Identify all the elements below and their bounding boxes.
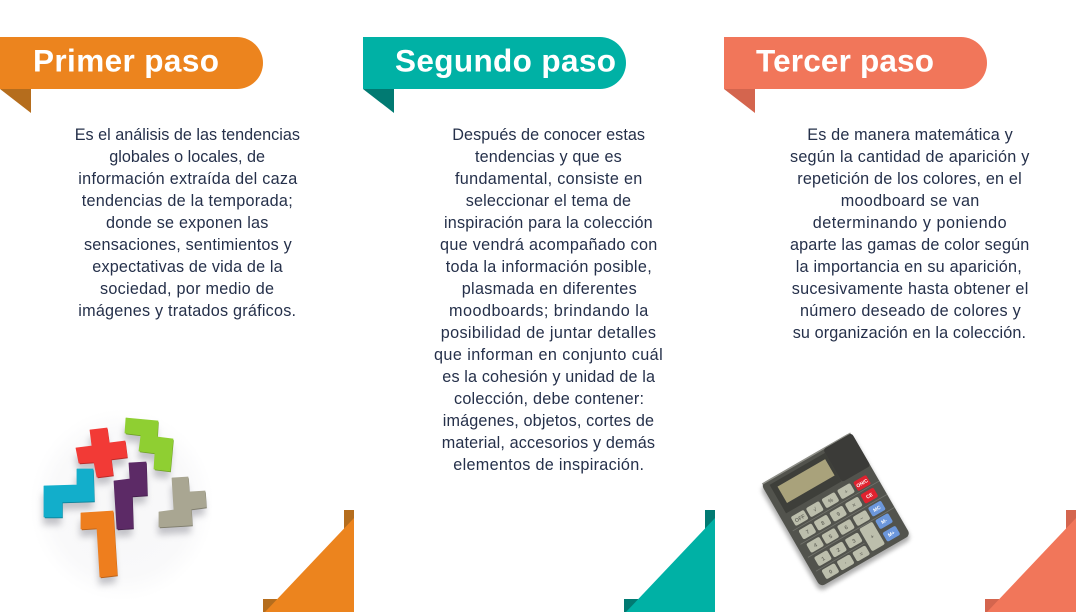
text block: primer paso: donde se exponen las: [106, 214, 268, 232]
text block: tercer paso: sucesivamente hasta obtener el: [792, 280, 1028, 298]
icon: calculator: 2: [836, 547, 842, 554]
text block: tercer paso: Es de manera matemática y: [807, 126, 1014, 144]
icon: calculator: ×: [851, 502, 857, 509]
text block: tercer paso: repetición de los colores, en el: [797, 170, 1022, 188]
text block: segundo paso: que informan en conjunto cuál: [434, 346, 663, 364]
text block: segundo paso: tendencias y que es: [475, 148, 622, 166]
text block: segundo paso: seleccionar el tema de: [466, 192, 631, 210]
text block: segundo paso: colección, debe contener:: [454, 390, 644, 408]
text block: segundo paso: posibilidad de juntar detalles: [441, 324, 656, 342]
icon: calculator: 3: [851, 538, 857, 545]
icon: calculator: OFF: [794, 513, 807, 524]
heading ribbon: Tercer paso: Tercer paso: [756, 42, 934, 78]
icon: calculator: −: [859, 516, 865, 523]
text block: tercer paso: su organización en la colección.: [793, 324, 1026, 342]
text block: segundo paso: fundamental, consiste en: [455, 170, 642, 188]
text block: primer paso: sociedad, por medio de: [100, 280, 274, 298]
text block: segundo paso: toda la información posible,: [446, 258, 652, 276]
text block: primer paso: tendencias de la temporada;: [82, 192, 293, 210]
text block: tercer paso: aparte las gamas de color según: [790, 236, 1029, 254]
text block: tercer paso: la importancia en su aparición,: [796, 258, 1022, 276]
icon: calculator: 9: [836, 511, 842, 518]
text block: primer paso: información extraída del caza: [78, 170, 297, 188]
heading ribbon: Segundo paso: Segundo paso: [395, 42, 616, 78]
heading ribbon: Segundo paso: [363, 37, 626, 113]
corner decoration: coral: [985, 510, 1076, 612]
heading ribbon: Primer paso: Primer paso: [33, 42, 219, 78]
icon: calculator: M+: [887, 530, 896, 539]
heading ribbon: Tercer paso: [724, 37, 987, 113]
icon: calculator: 8: [820, 520, 826, 527]
icon: calculator: 6: [844, 525, 849, 532]
icon: calculator: MC: [872, 505, 882, 514]
text block: segundo paso: es la cohesión y unidad de la: [442, 368, 655, 386]
text block: segundo paso: imágenes, objetos, cortes de: [443, 412, 654, 430]
text block: primer paso: expectativas de vida de la: [92, 258, 283, 276]
icon: calculator: +: [870, 534, 876, 541]
icon: calculator: ·: [844, 560, 849, 567]
text block: tercer paso: según la cantidad de aparición y: [790, 148, 1030, 166]
icon: calculator: √: [812, 506, 819, 514]
corner decoration: orange: [263, 510, 354, 612]
text block: primer paso: [75, 126, 300, 320]
heading ribbon: Primer paso: [0, 37, 263, 113]
text block: segundo paso: moodboards; brindando la: [449, 302, 648, 320]
icon: calculator: ON/C: [856, 478, 870, 489]
icon: calculator: 7: [805, 529, 811, 536]
icon: calculator: %: [827, 497, 835, 505]
icon: colourful wooden puzzle pieces: [30, 409, 214, 601]
text block: primer paso: sensaciones, sentimientos y: [84, 236, 293, 254]
icon: calculator: [760, 432, 912, 592]
text block: segundo paso: elementos de inspiración.: [453, 456, 644, 474]
text block: tercer paso: [790, 126, 1030, 342]
icon: calculator: =: [859, 551, 865, 558]
text block: segundo paso: inspiración para la colección: [444, 214, 653, 232]
text block: tercer paso: número deseado de colores y: [800, 302, 1022, 320]
icon: calculator: 5: [828, 534, 834, 541]
text block: tercer paso: determinando y poniendo: [813, 214, 1007, 232]
text block: segundo paso: plasmada en diferentes: [462, 280, 637, 298]
icon: calculator: ÷: [844, 489, 849, 496]
corner decoration: teal: [624, 510, 715, 612]
text block: segundo paso: material, accesorios y demás: [442, 434, 655, 452]
icon: calculator: 1: [821, 556, 826, 563]
text block: segundo paso: [434, 126, 663, 474]
text block: segundo paso: Después de conocer estas: [452, 126, 645, 144]
text block: segundo paso: que vendrá acompañado con: [440, 236, 657, 254]
text block: tercer paso: moodboard se van: [841, 192, 979, 210]
icon: calculator: M-: [880, 518, 889, 526]
text block: primer paso: Es el análisis de las tendencias: [75, 126, 300, 144]
icon: calculator: 0: [828, 569, 834, 576]
text block: primer paso: imágenes y tratados gráficos.: [78, 302, 296, 320]
text block: primer paso: globales o locales, de: [109, 148, 265, 166]
icon: calculator: CE: [865, 492, 875, 501]
icon: calculator: 4: [813, 542, 819, 549]
